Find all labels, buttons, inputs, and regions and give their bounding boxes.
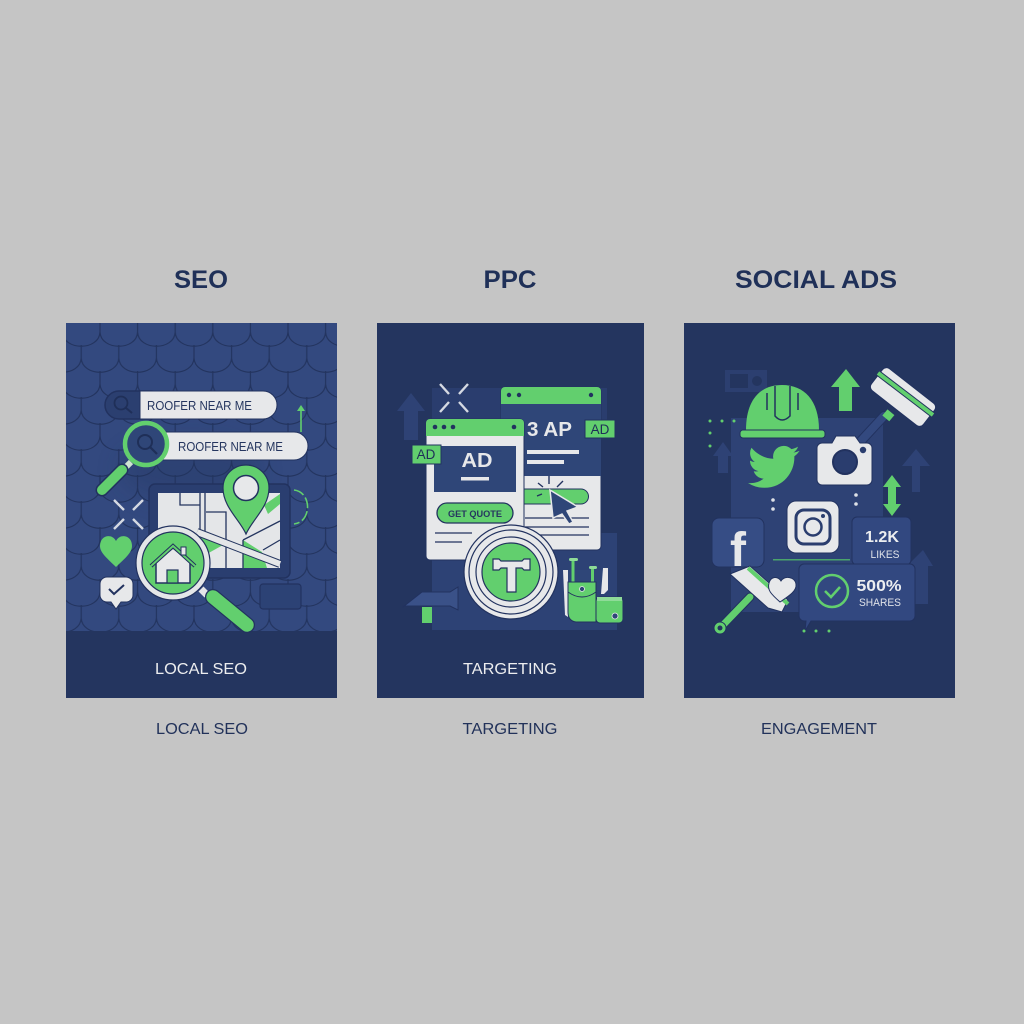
- front browser window: GET QUOTE: [448, 509, 502, 520]
- roof shingles: [66, 323, 337, 631]
- search bar 1: [105, 391, 277, 419]
- front browser window: [426, 419, 524, 560]
- search bar 1: ROOFER NEAR ME: [147, 398, 252, 413]
- card: likes: [852, 517, 911, 565]
- icon: heart: [100, 536, 132, 567]
- caption: Local SEO: LOCAL SEO: [156, 721, 248, 738]
- panel background: [684, 323, 955, 698]
- sparkle: [114, 500, 143, 529]
- back browser window: [501, 387, 601, 550]
- sparkles: [771, 493, 858, 511]
- sparkle: [440, 384, 468, 412]
- back browser window: 3 AP: [527, 419, 572, 441]
- heading: SOCIAL ADS: SOCIAL ADS: [735, 266, 897, 294]
- card: shares: [799, 564, 915, 631]
- icon: camera: [817, 436, 872, 485]
- icon: facebook: f: [730, 524, 747, 577]
- backdrop block: [731, 418, 883, 612]
- icon: paint roller top: [860, 366, 938, 442]
- panel: PPC: [377, 323, 644, 698]
- card: shares: SHARES: [859, 597, 901, 609]
- panel background: [377, 323, 644, 698]
- dark arrow: [397, 393, 425, 440]
- heading: SEO: SEO: [174, 266, 228, 294]
- magnifier: green: [102, 423, 167, 490]
- card: likes: 1.2K: [865, 529, 899, 546]
- caption: Targeting: TARGETING: [462, 721, 558, 738]
- icon: target hammer: [464, 525, 558, 619]
- search bar 2: ROOFER NEAR ME: [178, 439, 283, 454]
- outlined box: [260, 584, 301, 609]
- tag: AD left: [412, 445, 441, 464]
- dots bottom: [802, 630, 830, 632]
- icon: instagram: [787, 501, 839, 553]
- tag: AD left: AD: [417, 447, 436, 462]
- panel background: [66, 323, 337, 698]
- arrow: up green: [297, 405, 305, 432]
- icon: map pin: [223, 465, 269, 534]
- heading: PPC: PPC: [484, 266, 536, 294]
- search bar 2: [160, 432, 308, 460]
- icon: chat check: [100, 577, 133, 609]
- icon: cursor: [537, 476, 578, 524]
- dark arrows: [713, 442, 933, 604]
- panel: SEO: [66, 323, 337, 698]
- icon: hammer dark: [403, 587, 458, 623]
- card: shares: 500%: [856, 578, 902, 595]
- dashed arc: [294, 490, 308, 524]
- icon: hard hat: [740, 385, 825, 438]
- panel: Social Ads: [684, 323, 955, 698]
- band: [66, 631, 337, 698]
- front browser window: AD: [462, 450, 492, 472]
- camera outline dark: [725, 370, 767, 392]
- arrow: up down: [883, 475, 901, 516]
- magnifier: home: [136, 526, 247, 625]
- icon: paint roller bottom: [714, 566, 796, 634]
- map: [149, 484, 290, 578]
- card: likes: LIKES: [870, 549, 900, 561]
- backdrop blocks: [432, 388, 617, 630]
- arrow: up green: [831, 369, 860, 411]
- tag: AD right: [585, 420, 615, 438]
- icon: twitter bird: [748, 446, 800, 488]
- tag: AD right: AD: [591, 422, 610, 437]
- icon: tool belt: [563, 558, 623, 623]
- green line: [773, 559, 850, 560]
- dots: [708, 420, 736, 448]
- label: Local SEO inside: LOCAL SEO: [155, 661, 247, 678]
- caption: Engagement: ENGAGEMENT: [761, 721, 877, 738]
- label: Targeting inside: TARGETING: [463, 661, 557, 678]
- icon: facebook: [712, 518, 764, 577]
